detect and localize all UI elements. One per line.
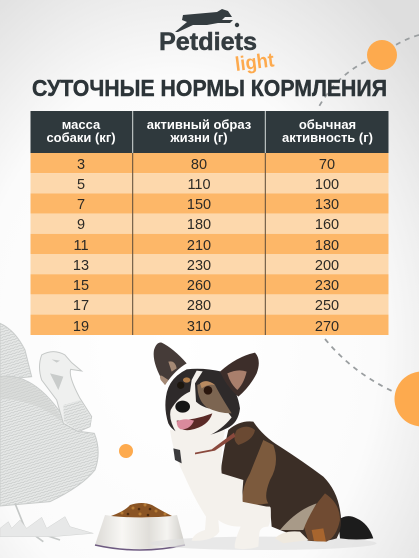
left brow	[183, 377, 190, 383]
turkey tail fan	[0, 323, 32, 380]
grass	[0, 517, 93, 537]
icon: logo dot	[235, 23, 239, 27]
turkey head and neck	[39, 352, 92, 432]
table rows: 11	[73, 238, 89, 254]
table rows: 100	[315, 177, 339, 193]
table rows: 19	[73, 319, 89, 335]
table rows: 7	[77, 197, 85, 213]
table rows: 9	[77, 217, 85, 233]
head	[165, 369, 240, 437]
neck tan patch	[235, 427, 255, 445]
table rows: 210	[187, 238, 211, 254]
table rows	[30, 153, 388, 335]
title: СУТОЧНЫЕ НОРМЫ КОРМЛЕНИЯ	[32, 75, 387, 101]
orange circle: top right	[367, 40, 397, 70]
table rows: 230	[315, 278, 339, 294]
orange circle: right edge	[394, 372, 419, 426]
dashed arc line	[317, 35, 419, 391]
bowl rim	[95, 545, 185, 550]
rear leg tan	[303, 493, 340, 542]
table rows: 270	[315, 319, 339, 335]
white chest and legs	[170, 430, 271, 549]
table rows: 13	[73, 258, 89, 274]
logo	[159, 9, 276, 76]
logo wordmark: Petdiets	[159, 28, 257, 56]
logo sub-brand: light	[234, 49, 276, 76]
tail	[338, 516, 373, 539]
table rows: 150	[187, 197, 211, 213]
table header: обычная	[299, 117, 356, 132]
table rows: 70	[319, 157, 335, 173]
table rows: 130	[315, 197, 339, 213]
icon: running dog	[175, 9, 233, 32]
table rows: 17	[73, 298, 89, 314]
dark back and body	[220, 421, 341, 541]
feeding table	[30, 111, 388, 335]
table rows: 160	[315, 217, 339, 233]
kibble	[111, 503, 172, 518]
eyes	[177, 382, 184, 389]
table rows: 250	[315, 298, 339, 314]
fur tuft	[173, 448, 182, 463]
back paw	[275, 531, 308, 543]
illustration: turkey engraving	[0, 323, 98, 542]
turkey body	[0, 376, 98, 506]
table header: жизни (г)	[169, 130, 228, 145]
nose	[175, 401, 190, 413]
mouth and tongue	[177, 413, 212, 430]
floor shadow	[150, 537, 377, 550]
table header: собаки (кг)	[46, 130, 116, 145]
table rows: 80	[191, 157, 207, 173]
table rows: 15	[73, 278, 89, 294]
right cheek	[197, 382, 232, 413]
table rows: 280	[187, 298, 211, 314]
left ear	[154, 343, 187, 385]
face white blaze and muzzle	[170, 371, 232, 439]
table rows: 260	[187, 278, 211, 294]
table rows: 180	[315, 238, 339, 254]
orange circle: small	[119, 444, 133, 458]
right ear	[220, 353, 259, 397]
table header: активность (г)	[282, 130, 373, 145]
turkey legs	[0, 503, 60, 542]
collar	[195, 433, 235, 454]
belly highlight	[280, 503, 317, 530]
table rows: 5	[77, 177, 85, 193]
table header: активный образ	[147, 117, 252, 132]
bowl body	[95, 515, 185, 549]
table rows: 180	[187, 217, 211, 233]
table rows: 200	[315, 258, 339, 274]
table rows: 230	[187, 258, 211, 274]
illustration: food bowl	[95, 503, 185, 550]
table rows: 3	[77, 157, 85, 173]
tan body streak	[242, 440, 276, 507]
table header: масса	[62, 117, 101, 132]
table header	[30, 111, 388, 153]
table rows: 110	[187, 177, 211, 193]
table rows: 310	[187, 319, 211, 335]
illustration: corgi dog	[150, 343, 377, 550]
